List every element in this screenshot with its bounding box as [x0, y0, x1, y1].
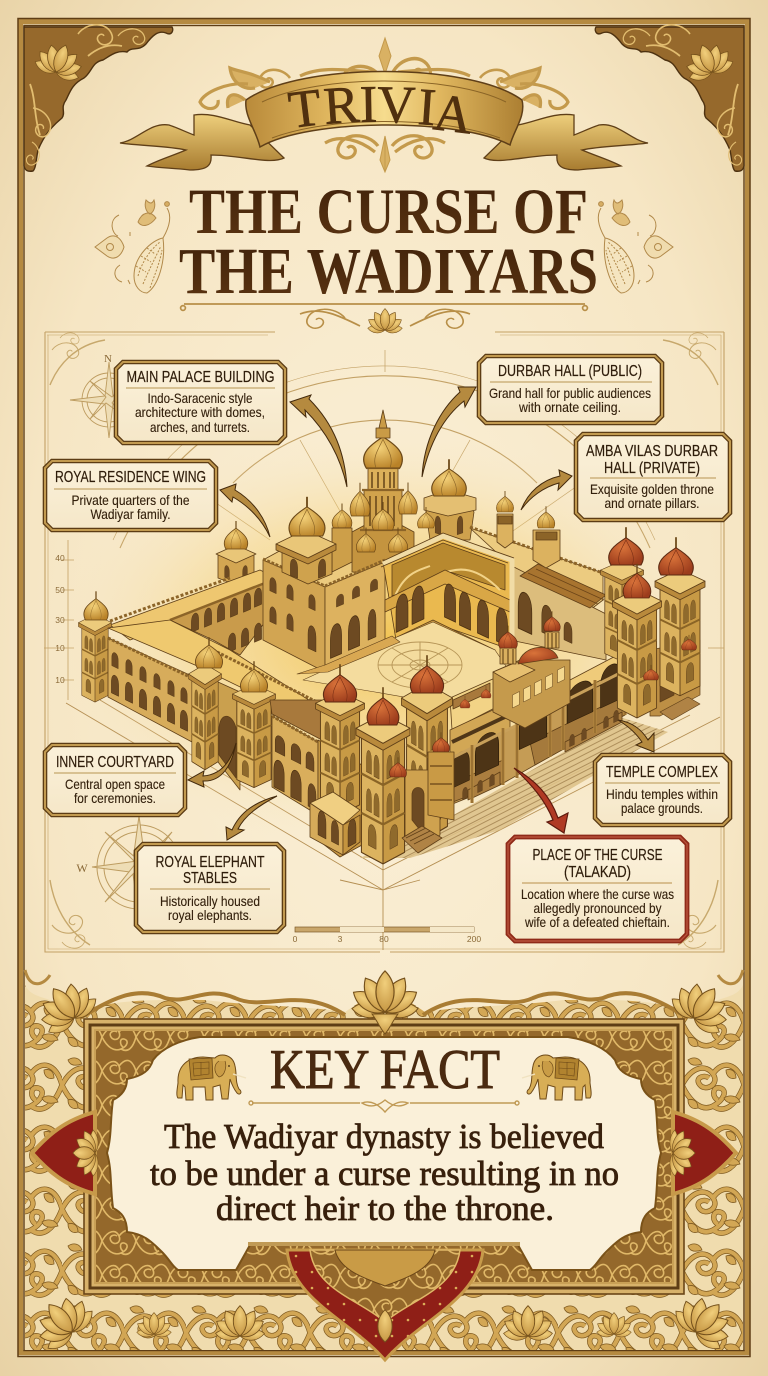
compass arcs — [120, 376, 650, 548]
callout: temple complex: palace grounds. — [621, 801, 703, 816]
callout: place of the curse: wife of a defeated chieftain. — [524, 915, 670, 930]
central tower — [332, 410, 435, 572]
left ribbon tail — [120, 114, 284, 170]
right medallion lotus — [669, 1128, 695, 1178]
back left wing — [110, 570, 290, 655]
peacock ornaments — [95, 200, 673, 293]
callout: royal residence wing: ROYAL RESIDENCE WING — [55, 469, 206, 486]
top corner ornaments — [24, 25, 744, 171]
callout: temple complex: TEMPLE COMPLEX — [606, 764, 719, 781]
right ribbon tail — [484, 114, 648, 170]
callout arrows — [188, 387, 654, 840]
scale bar: 80 — [379, 934, 389, 944]
callout: amba vilas durbar hall: and ornate pillars. — [604, 496, 700, 511]
left corner tower — [78, 591, 112, 702]
main block walls — [263, 559, 385, 674]
front right arcade wing — [450, 650, 630, 805]
key fact text: direct heir to the throne. — [216, 1189, 554, 1228]
panel bottom bar — [248, 1242, 520, 1246]
callout: royal residence wing: Private quarters of the — [72, 493, 190, 508]
back right wing — [470, 491, 606, 660]
ruler — [44, 540, 724, 700]
callout: inner courtyard: for ceremonies. — [74, 791, 156, 806]
callout: royal elephant stables: STABLES — [183, 870, 237, 887]
isometric palace illustration — [78, 410, 705, 864]
scale bar: 3 — [338, 934, 343, 944]
callout: temple complex — [595, 755, 730, 825]
blueprint drawing panel — [44, 332, 724, 952]
corner flourishes — [50, 333, 718, 948]
gold pavilion left — [216, 521, 256, 585]
cream text panel — [107, 1037, 661, 1270]
arrow: durbar hall — [422, 387, 476, 477]
ground shadow hatching — [360, 718, 668, 858]
ruler numbers: 10 — [55, 643, 65, 653]
callout: royal elephant stables: ROYAL ELEPHANT — [156, 854, 265, 871]
ruler numbers: 30 — [55, 615, 65, 625]
callout: inner courtyard: Central open space — [65, 777, 165, 792]
arrow: royal residence wing — [220, 484, 270, 537]
key fact heading: KEY FACT — [270, 1039, 500, 1101]
callout: main palace building — [116, 362, 285, 443]
arrow: royal elephant stables — [226, 796, 277, 840]
scale bar: 0 — [293, 934, 298, 944]
callout: amba vilas durbar hall: AMBA VILAS DURBAR — [586, 443, 718, 460]
compass west: W — [76, 861, 88, 875]
ribbon centre — [246, 72, 523, 147]
ruler numbers: 10 — [55, 675, 65, 685]
right corner towers — [600, 527, 705, 720]
key fact ornamental frame — [25, 970, 743, 1360]
top centre lotus — [349, 971, 421, 1034]
compass north — [70, 353, 145, 438]
compass west — [76, 816, 190, 918]
corner lotuses — [25, 971, 743, 1357]
callout: royal elephant stables — [136, 844, 284, 932]
main title: THE CURSE OF — [189, 176, 588, 248]
pavilion on main block — [276, 497, 336, 584]
callout: place of the curse: PLACE OF THE CURSE — [532, 847, 662, 864]
key fact text — [150, 1117, 619, 1228]
front porch and steps — [310, 792, 442, 855]
elephant left — [177, 1055, 246, 1100]
ruler numbers: 40 — [55, 553, 65, 563]
callout: main palace building: architecture with domes, — [135, 405, 265, 420]
callout: royal elephant stables: Historically housed — [160, 894, 260, 909]
banner title: TRIVIA — [285, 76, 476, 146]
callout: durbar hall — [479, 356, 662, 423]
callout: main palace building: arches, and turrets. — [150, 420, 250, 435]
title divider — [181, 304, 587, 334]
scale bar — [293, 927, 481, 944]
gate towers left — [188, 637, 276, 790]
callout: amba vilas durbar hall — [576, 434, 730, 520]
ruler numbers: 50 — [55, 585, 65, 595]
arrow: amba vilas hall — [521, 470, 572, 510]
scale bar: 200 — [467, 934, 481, 944]
key fact text: The Wadiyar dynasty is believed — [164, 1117, 604, 1156]
palace glow — [55, 430, 715, 850]
arrow: main palace building — [290, 395, 347, 487]
right upper dome pavilion — [424, 459, 476, 540]
cutaway hall interior — [381, 533, 514, 656]
main block roof — [263, 548, 400, 587]
main title — [179, 176, 598, 308]
front red-domed towers — [316, 655, 454, 864]
compass north: N — [104, 353, 112, 365]
callout: place of the curse — [508, 837, 687, 941]
courtyard floor — [297, 622, 510, 705]
key fact text: to be under a curse resulting in no — [150, 1154, 619, 1193]
scroll band — [25, 985, 743, 1350]
central gate — [453, 611, 570, 728]
callout: inner courtyard: INNER COURTYARD — [56, 754, 174, 771]
bottom red medallion — [287, 1250, 483, 1360]
right red medallion — [673, 1112, 736, 1194]
trivia banner — [120, 38, 648, 172]
callout: amba vilas durbar hall: HALL (PRIVATE) — [604, 460, 700, 477]
front wing segment — [270, 700, 322, 815]
banner flourishes — [200, 38, 568, 172]
callout: royal elephant stables: royal elephants. — [168, 908, 252, 923]
callout: main palace building: Indo-Saracenic style — [148, 391, 253, 406]
callout: place of the curse: Location where the curse was — [521, 887, 674, 902]
front left wing — [108, 620, 317, 742]
callout: durbar hall: DURBAR HALL (PUBLIC) — [498, 363, 642, 380]
arrow: place of the curse — [514, 768, 568, 833]
callout: place of the curse: (TALAKAD) — [564, 864, 631, 881]
main title: THE WADIYARS — [179, 235, 598, 308]
callout: amba vilas durbar hall: Exquisite golden throne — [590, 482, 714, 497]
callout: place of the curse: allegedly pronounced by — [534, 901, 662, 916]
inner ornate band — [95, 1030, 673, 1283]
callout: royal residence wing — [45, 461, 216, 530]
arrow: inner courtyard — [188, 743, 236, 787]
callout: temple complex: Hindu temples within — [606, 787, 718, 802]
callout: durbar hall: Grand hall for public audiences — [489, 386, 651, 401]
elephant right — [522, 1055, 591, 1100]
callout: royal residence wing: Wadiyar family. — [90, 507, 170, 522]
outer frame — [84, 1019, 684, 1294]
arrow: temple complex — [618, 720, 654, 752]
heading divider — [249, 1100, 519, 1112]
ruler numbers — [55, 553, 65, 685]
callout: main palace building: MAIN PALACE BUILDING — [126, 369, 274, 386]
callout: inner courtyard — [45, 745, 185, 815]
left medallion lotus — [73, 1128, 99, 1178]
ground construction lines — [66, 700, 720, 950]
callout: durbar hall: with ornate ceiling. — [518, 400, 621, 415]
right end wall and door — [650, 640, 700, 720]
left red medallion — [32, 1112, 95, 1194]
